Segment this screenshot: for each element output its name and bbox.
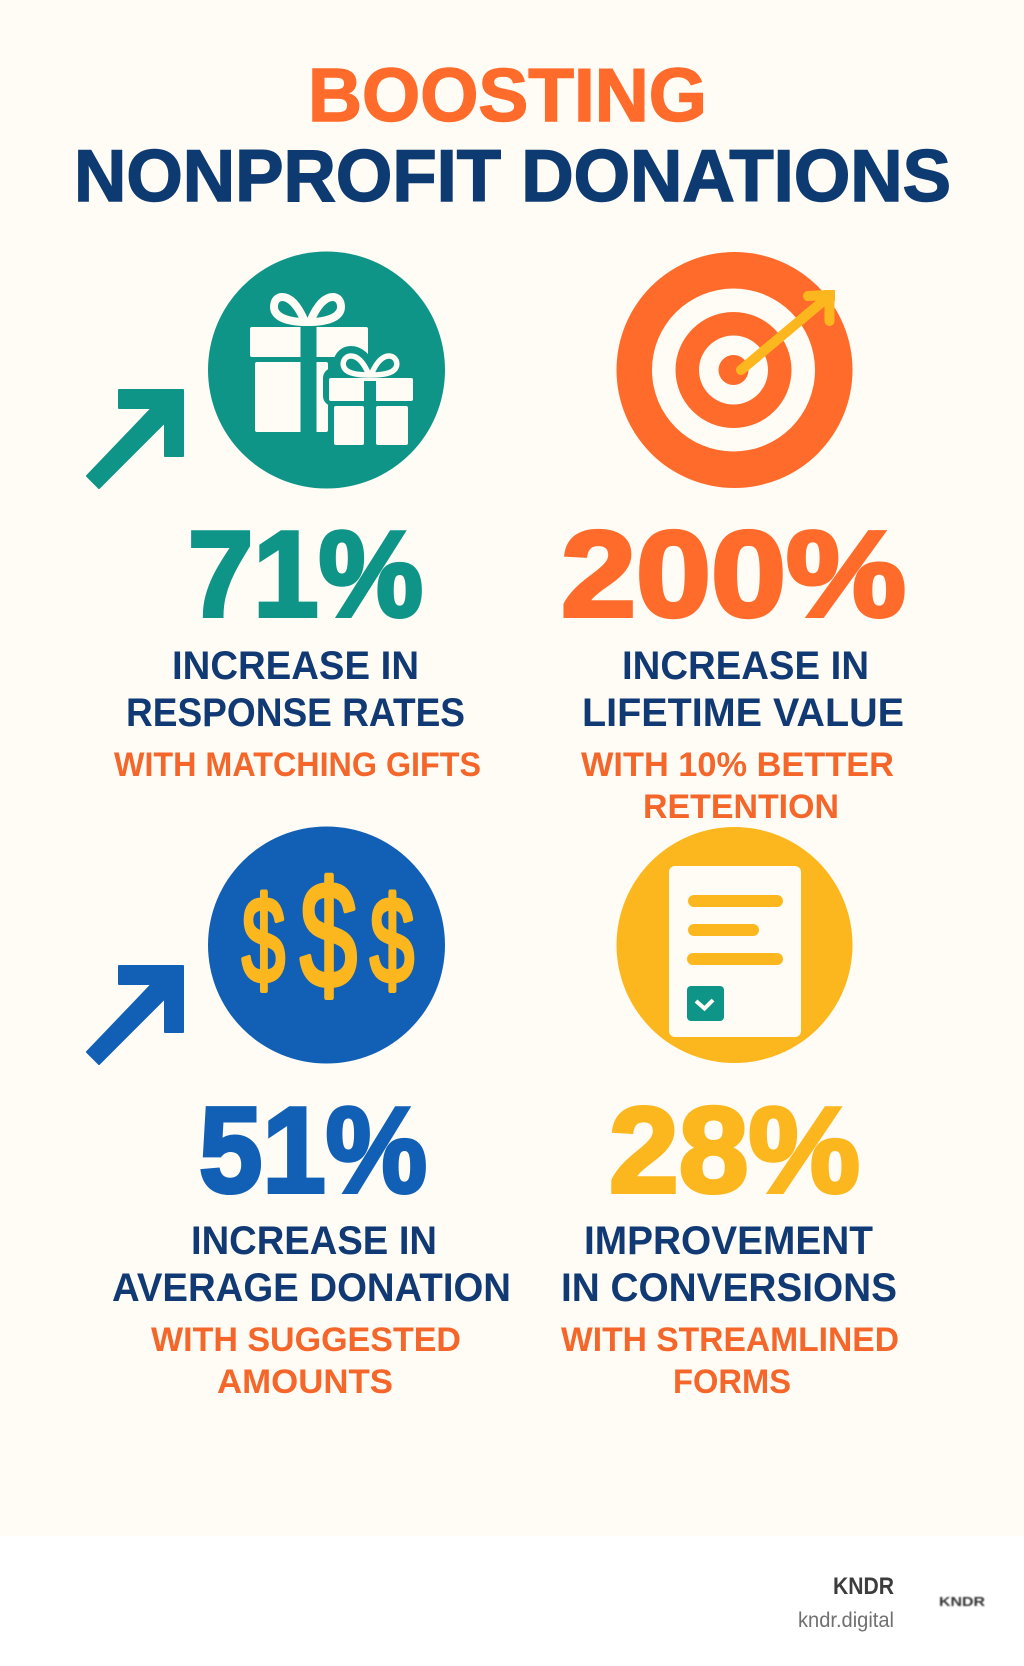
sublabel: better retention: WITH 10% BETTER — [581, 746, 894, 784]
label: average donation: INCREASE IN — [191, 1219, 437, 1263]
footer: brand: kndr.digital — [798, 1609, 894, 1632]
label: conversions: IN CONVERSIONS — [561, 1266, 897, 1310]
sublabel: suggested amounts: WITH SUGGESTED — [151, 1321, 461, 1359]
label: response rates — [126, 644, 465, 735]
icon: form document — [616, 827, 852, 1063]
stat: 51%: 51% — [199, 1082, 427, 1218]
label: average donation: AVERAGE DONATION — [112, 1266, 511, 1310]
title: BOOSTING — [308, 53, 707, 137]
label: response rates: RESPONSE RATES — [126, 691, 465, 735]
sublabel: streamlined forms: WITH STREAMLINED — [561, 1321, 899, 1359]
arrow: blue up — [87, 966, 183, 1064]
icon: gifts — [208, 252, 445, 488]
icon: target — [616, 252, 852, 488]
panel: streamlined forms — [561, 827, 899, 1401]
panel: suggested amounts — [87, 826, 511, 1401]
sublabel: suggested amounts: AMOUNTS — [217, 1363, 393, 1401]
footer: brand — [798, 1573, 986, 1632]
stat: 200%: 200% — [561, 506, 906, 642]
icon: dollars: $ — [242, 872, 285, 1008]
sublabel: matching gifts: WITH MATCHING GIFTS — [114, 746, 481, 784]
title: NONPROFIT DONATIONS — [74, 136, 951, 217]
label: average donation — [112, 1219, 511, 1310]
label: conversions: IMPROVEMENT — [584, 1219, 873, 1263]
icon: dollars: $ — [370, 872, 414, 1008]
label: lifetime value: INCREASE IN — [622, 644, 869, 688]
label: response rates: INCREASE IN — [172, 644, 419, 688]
stat: 71%: 71% — [188, 506, 423, 642]
sublabel: suggested amounts — [151, 1321, 461, 1401]
sublabel: streamlined forms: FORMS — [673, 1363, 791, 1401]
sublabel: streamlined forms — [561, 1321, 899, 1401]
footer: brand: KNDR — [833, 1573, 894, 1600]
label: conversions — [561, 1219, 897, 1310]
stat: 28%: 28% — [609, 1082, 860, 1218]
arrow: teal up — [87, 390, 183, 488]
label: lifetime value — [582, 644, 904, 735]
label: lifetime value: LIFETIME VALUE — [582, 691, 904, 735]
footer: brand: KNDR — [939, 1594, 986, 1609]
title — [74, 53, 951, 217]
icon: dollars: $ — [300, 850, 357, 1019]
panel: retention — [561, 252, 906, 826]
panel: matching gifts — [87, 252, 481, 784]
icon: dollars — [208, 826, 445, 1064]
sublabel: better retention — [581, 746, 894, 826]
sublabel: better retention: RETENTION — [643, 788, 839, 826]
